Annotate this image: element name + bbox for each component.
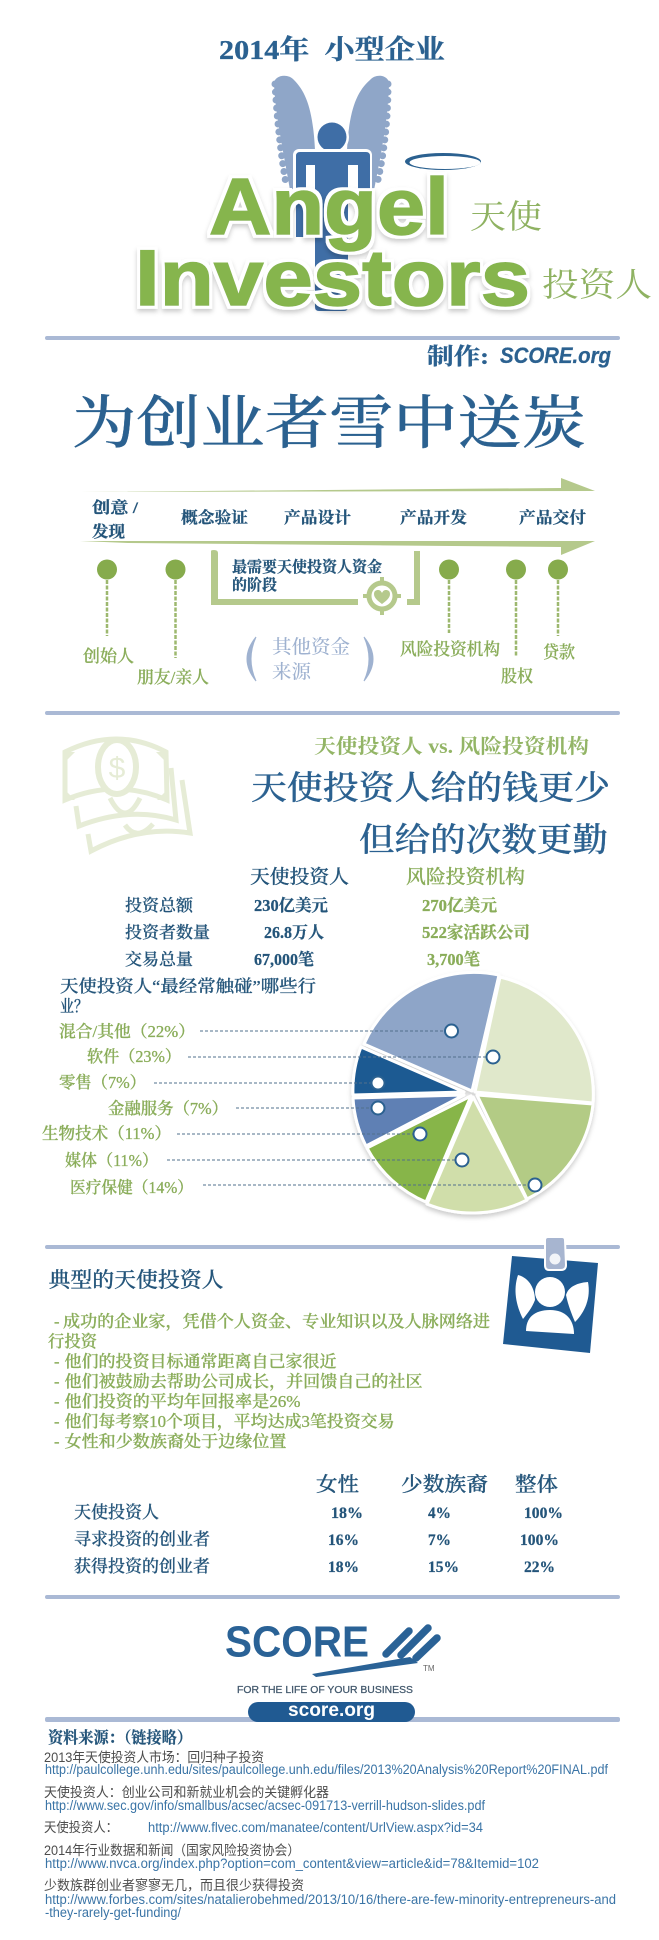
- demographics table: 4%: [428, 1505, 451, 1522]
- stage labels: [92, 498, 586, 541]
- pie labels and leader lines: [42, 1022, 542, 1197]
- comparison table: 230亿美元: [254, 896, 328, 915]
- logo: Investors wordmark: Investors: [135, 233, 530, 322]
- sources list: http://www.nvca.org/index.php?option=com_content&view=article&id=78&Itemid=102: [45, 1856, 539, 1871]
- funding stage timeline: [80, 478, 595, 687]
- sources list: 2013年天使投资人市场：回归种子投资: [44, 1749, 264, 1765]
- comparison table: 522家活跃公司: [422, 922, 530, 942]
- comparison heading: 天使投资人 vs. 风险投资机构: [314, 734, 589, 758]
- comparison table: [125, 866, 530, 969]
- other funding sources: 其他资金: [272, 636, 350, 658]
- funder labels: 贷款: [543, 643, 575, 662]
- demographics table: 18%: [331, 1505, 363, 1522]
- typical angel investor list: 成功的企业家，凭借个人资金、专业知识以及人脉网络进: [63, 1312, 491, 1331]
- funder labels: 创始人: [83, 647, 134, 666]
- comparison table: 3,700笔: [427, 949, 480, 969]
- sources list: 少数族群创业者寥寥无几，而且很少获得投资: [44, 1877, 304, 1893]
- pie labels and leader lines: 零售（7%）: [59, 1072, 146, 1092]
- sources list: -they-rarely-get-funding/: [45, 1905, 181, 1920]
- comparison heading: [251, 734, 611, 859]
- comparison heading: 天使投资人给的钱更少: [251, 770, 611, 807]
- main headline: 为创业者雪中送炭: [72, 391, 586, 456]
- score.org pill: [248, 1700, 415, 1722]
- icon: heart target: [363, 577, 401, 615]
- demographics table: 获得投资的创业者: [74, 1557, 210, 1576]
- typical angel investor list: 他们投资的平均年回报率是26%: [64, 1391, 301, 1411]
- comparison table: 270亿美元: [422, 896, 498, 915]
- angel stage text: 最需要天使投资人资金: [232, 557, 382, 576]
- typical angel investor list: 女性和少数族裔处于边缘位置: [64, 1432, 286, 1451]
- credit: SCORE.org: [427, 343, 612, 369]
- credit: SCORE.org: 制作:: [427, 344, 489, 369]
- SCORE logo: FOR THE LIFE OF YOUR BUSINESS: [237, 1685, 413, 1696]
- comparison table: 26.8万人: [264, 923, 324, 942]
- sources heading: 资料来源：（链接略）: [48, 1728, 192, 1747]
- sources list: http://www.sec.gov/info/smallbus/acsec/acsec-091713-verrill-hudson-slides.pdf: [45, 1798, 485, 1813]
- sources list: http://www.forbes.com/sites/natalierobehmed/2013/10/16/there-are-few-minority-entrepreneurs-and: [45, 1892, 616, 1907]
- pie chart heading: 业？: [60, 997, 88, 1016]
- comparison table: 交易总量: [125, 950, 193, 969]
- pie labels and leader lines: 混合/其他（22%）: [59, 1022, 195, 1041]
- arrow: top: [80, 478, 595, 492]
- angel stage text: [232, 557, 382, 594]
- logo: Angel wordmark: Angel: [209, 162, 449, 251]
- other funding sources: [247, 636, 373, 683]
- demographics table: [74, 1473, 563, 1576]
- comparison table: 投资者数量: [125, 923, 210, 942]
- demographics table: 寻求投资的创业者: [74, 1530, 210, 1549]
- pie chart heading: 天使投资人“最经常触碰”哪些行: [60, 977, 316, 996]
- sources list: 2014年行业数据和新闻（国家风险投资协会）: [44, 1842, 300, 1858]
- funder labels: 风险投资机构: [400, 640, 500, 659]
- stage labels: 发现: [92, 523, 125, 541]
- typical angel investor list: 他们的投资目标通常距离自己家很近: [64, 1352, 336, 1371]
- sources list: http://www.flvec.com/manatee/content/UrlView.aspx?id=34: [148, 1820, 483, 1835]
- logo: halo: [405, 153, 481, 170]
- score.org pill: score.org: [288, 1700, 375, 1721]
- comparison table: 风险投资机构: [406, 866, 525, 888]
- demographics table: 少数族裔: [401, 1473, 488, 1496]
- arrow: bottom: [80, 541, 595, 555]
- typical angel investor list: -: [54, 1372, 60, 1391]
- typical angel investor list: 他们被鼓励去帮助公司成长，并回馈自己的社区: [64, 1372, 422, 1391]
- pie labels and leader lines: 医疗保健（14%）: [70, 1178, 193, 1197]
- icon: money bills: $: [109, 752, 126, 785]
- credit: SCORE.org: SCORE.org: [500, 343, 612, 368]
- sources list: 天使投资人：: [44, 1819, 118, 1835]
- SCORE logo: [225, 1618, 437, 1696]
- title: 2014年 小型企业: [219, 35, 445, 65]
- demographics table: 100%: [524, 1505, 563, 1522]
- icon: money bills: [65, 739, 190, 851]
- comparison table: 67,000笔: [254, 949, 314, 969]
- demographics table: 7%: [428, 1532, 451, 1549]
- funder labels: 股权: [501, 667, 533, 686]
- comparison table: 投资总额: [125, 896, 194, 915]
- comparison heading: 但给的次数更勤: [359, 822, 608, 859]
- sources list: 天使投资人：创业公司和新就业机会的关键孵化器: [44, 1784, 329, 1800]
- pie chart: [353, 972, 593, 1213]
- stage labels: 创意 /: [92, 498, 139, 517]
- typical angel investor list: -: [54, 1392, 60, 1411]
- typical angel investor list: -: [54, 1352, 60, 1371]
- sources list: [44, 1749, 616, 1920]
- typical angel investor list: -: [54, 1432, 60, 1451]
- funding pins: [97, 560, 568, 658]
- SCORE logo: TM: [423, 1664, 435, 1673]
- sources list: http://paulcollege.unh.edu/sites/paulcollege.unh.edu/files/2013%20Analysis%20Report%20FINAL.pdf: [45, 1762, 608, 1777]
- typical angel investor list: -: [54, 1312, 60, 1331]
- demographics table: 100%: [520, 1532, 559, 1549]
- typical angel investor list: -: [54, 1412, 60, 1431]
- funder labels: [83, 640, 575, 687]
- demographics table: 22%: [524, 1559, 555, 1576]
- demographics table: 整体: [515, 1473, 558, 1496]
- demographics table: 16%: [328, 1532, 359, 1549]
- angel stage text: 的阶段: [232, 575, 277, 594]
- stage labels: 概念验证: [181, 508, 248, 527]
- demographics table: 18%: [328, 1559, 359, 1576]
- demographics table: 天使投资人: [74, 1503, 159, 1522]
- stage labels: 产品设计: [284, 509, 351, 527]
- pie labels and leader lines: 金融服务（7%）: [108, 1099, 228, 1118]
- stage labels: 产品交付: [519, 508, 586, 527]
- logo: angel figure: [274, 76, 389, 311]
- logo caption: 天使: 天使: [470, 199, 542, 236]
- typical angel investor heading: 典型的天使投资人: [48, 1268, 224, 1292]
- other funding sources: 来源: [272, 661, 312, 683]
- comparison table: 天使投资人: [250, 866, 349, 888]
- pie labels and leader lines: 媒体（11%）: [65, 1151, 158, 1170]
- logo caption: 投资人: 投资人: [542, 267, 652, 304]
- pie labels and leader lines: 生物技术（11%）: [42, 1124, 171, 1143]
- funder labels: 朋友/亲人: [137, 668, 209, 687]
- bracket: angel stage: [211, 550, 420, 605]
- typical angel investor list: [48, 1312, 491, 1451]
- stage labels: 产品开发: [400, 509, 467, 527]
- typical angel investor list: 他们每考察10个项目，平均达成3笔投资交易: [64, 1412, 395, 1431]
- icon: angel photo card: [503, 1237, 598, 1353]
- demographics table: 女性: [316, 1473, 359, 1496]
- SCORE logo: SCORE: [225, 1618, 369, 1666]
- demographics table: 15%: [428, 1559, 459, 1576]
- pie labels and leader lines: 软件（23%）: [87, 1047, 181, 1066]
- pie chart heading: [60, 977, 316, 1016]
- typical angel investor list: 行投资: [48, 1332, 98, 1351]
